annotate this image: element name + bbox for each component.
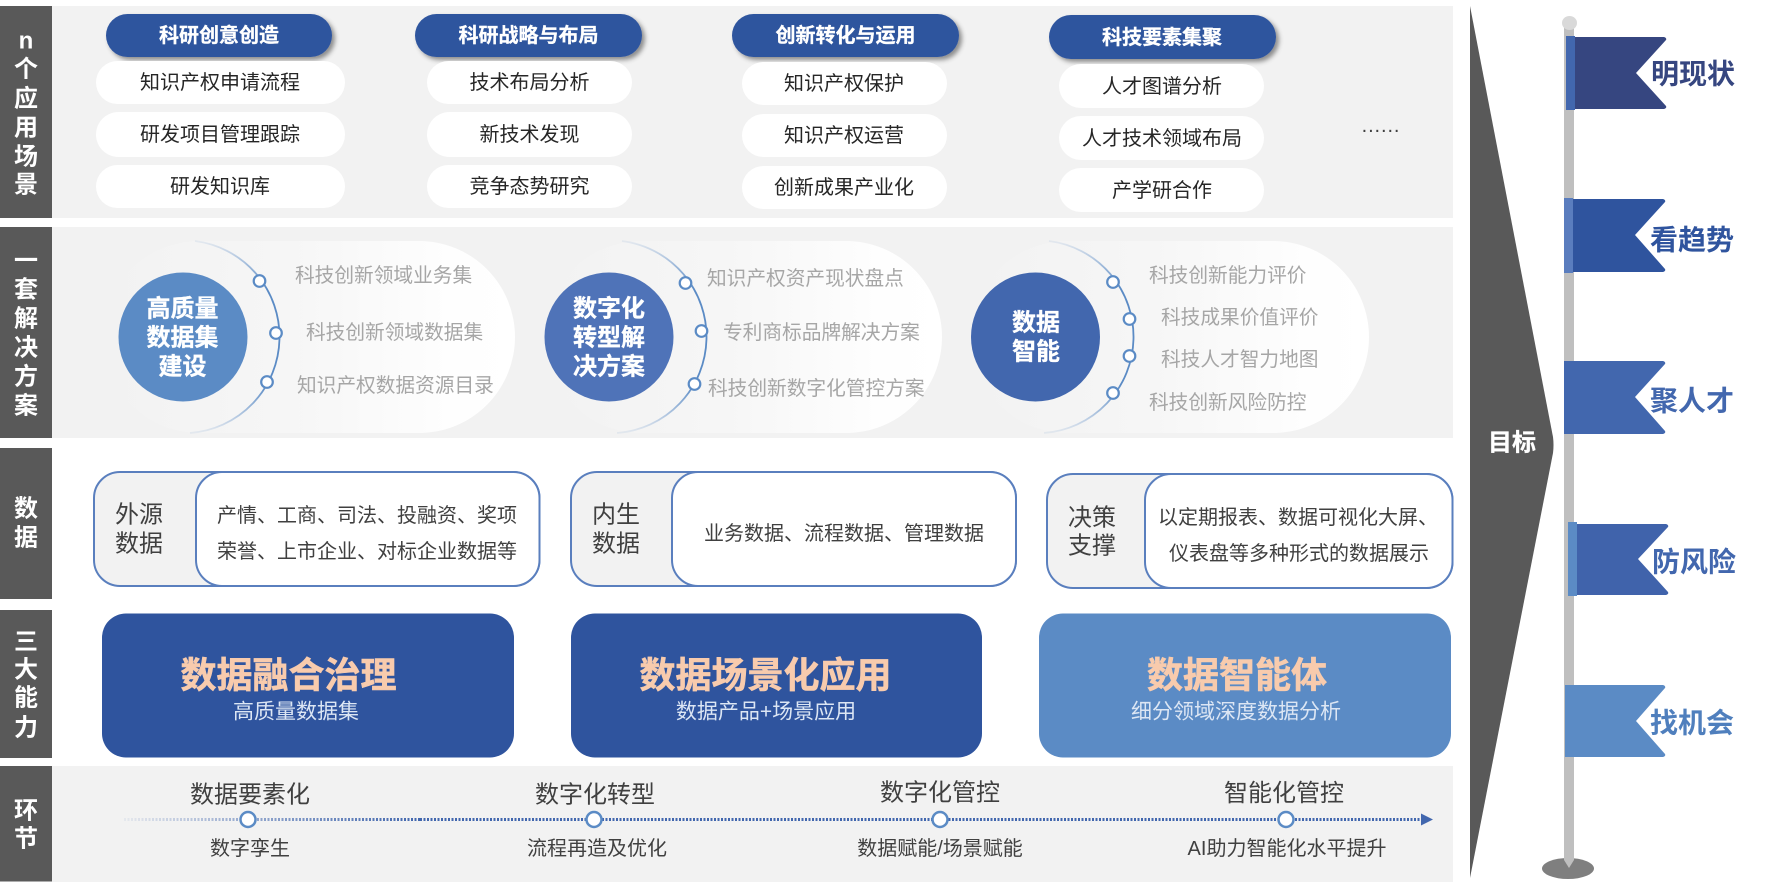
solution: digital transformation: 决方案 [573, 353, 645, 381]
solution: digital transformation: 数字化 [573, 296, 645, 323]
side label: stages: 环 [14, 798, 38, 824]
solution: digital transformation: 知识产权资产现状盘点 [707, 268, 904, 290]
stage 3: 数字化管控 [880, 780, 1000, 806]
side label: n application scenarios [0, 6, 52, 218]
side label: n application scenarios: 个 [14, 56, 38, 83]
column: research creativity: 研发项目管理跟踪 [140, 123, 300, 146]
solution: data intelligence: 科技创新风险防控 [1149, 392, 1306, 414]
side label: solutions: 案 [14, 392, 38, 420]
side label: solutions [0, 227, 52, 438]
stage 4 [1188, 780, 1386, 860]
panel: n application scenarios [0, 6, 1453, 218]
data card: decision support: 仪表盘等多种形式的数据展示 [1169, 542, 1429, 565]
column: research creativity [96, 14, 345, 208]
panel: three capabilities [0, 610, 1451, 758]
stage 2: 数字化转型 [535, 782, 655, 808]
side label: data [0, 448, 52, 599]
capability: data agent [1039, 614, 1451, 758]
data card: external [94, 472, 540, 586]
side label: n application scenarios: 场 [14, 144, 38, 170]
side label: solutions: 方 [14, 362, 38, 390]
ellipsis: ...... [1362, 115, 1400, 137]
solution: data intelligence [971, 241, 1369, 433]
data card: internal [571, 472, 1016, 586]
solution: digital transformation: 专利商标品牌解决方案 [723, 322, 920, 344]
column: research strategy: 竞争态势研究 [470, 175, 590, 198]
capability: data agent: 数据智能体 [1147, 654, 1327, 696]
stage 4: AI助力智能化水平提升 [1188, 837, 1386, 860]
panel: stages timeline [0, 766, 1453, 882]
solution: data intelligence: 科技创新能力评价 [1149, 265, 1307, 287]
side label: stages: 节 [14, 826, 38, 852]
data card: external: 产情、工商、司法、投融资、奖项 [217, 504, 517, 527]
column: talent elements: 科技要素集聚 [1102, 26, 1222, 49]
data card: external: 外源 [115, 502, 163, 529]
flag: trends: 看趋势 [1650, 224, 1734, 256]
column: research strategy [415, 14, 642, 208]
solution: high quality dataset: 高质量 [146, 296, 218, 323]
stage 3 [857, 780, 1023, 860]
side label: capabilities: 能 [14, 684, 38, 712]
side label: n application scenarios: 景 [14, 172, 38, 198]
solution: digital transformation [544, 241, 942, 433]
flag: opportunity: 找机会 [1650, 708, 1734, 738]
capability: data agent: 细分领域深度数据分析 [1131, 700, 1341, 724]
data card: decision support: 支撑 [1068, 533, 1116, 560]
arrow: goal triangle: 目标 [1488, 430, 1536, 456]
capability: data governance [102, 614, 514, 758]
solution: digital transformation: 转型解 [573, 325, 645, 352]
solution: data intelligence: 科技人才智力地图 [1161, 349, 1318, 371]
stage 1: 数字孪生 [210, 837, 290, 860]
flagpole [1542, 16, 1594, 879]
side label: capabilities: 三 [14, 628, 38, 656]
capability: data governance: 高质量数据集 [233, 700, 359, 724]
stage 1: 数据要素化 [190, 782, 310, 808]
panel: data [0, 448, 1452, 599]
flag: opportunity [1565, 685, 1734, 757]
data card: internal: 业务数据、流程数据、管理数据 [704, 522, 984, 545]
data card: internal: 内生 [592, 502, 640, 529]
column: innovation transfer: 知识产权运营 [784, 124, 904, 147]
capability: scenario application: 数据场景化应用 [639, 654, 892, 696]
solution: high quality dataset: 数据集 [146, 325, 218, 352]
capability: data governance: 数据融合治理 [180, 654, 397, 696]
side label: solutions: 解 [14, 306, 38, 332]
column: research creativity: 知识产权申请流程 [140, 71, 300, 94]
flag: current state [1566, 36, 1735, 110]
flag: talent: 聚人才 [1650, 386, 1734, 416]
timeline arrow [124, 814, 1433, 826]
side label: capabilities [0, 610, 52, 758]
data card: decision support: 决策 [1068, 505, 1116, 532]
solution: data intelligence: 智能 [1012, 339, 1060, 366]
stage 1 [190, 782, 310, 860]
flag: risk [1568, 522, 1736, 596]
stage 3: 数据赋能/场景赋能 [857, 837, 1023, 860]
column: talent elements: 人才图谱分析 [1102, 75, 1222, 98]
stage 2: 流程再造及优化 [527, 837, 667, 860]
flag: talent [1564, 361, 1734, 434]
capability: scenario application: 数据产品+场景应用 [676, 700, 856, 724]
column: research creativity: 研发知识库 [170, 175, 270, 198]
side label: stages [0, 766, 52, 882]
side label: solutions: 一 [14, 248, 38, 274]
side label: capabilities: 大 [14, 656, 38, 684]
stage 4: 智能化管控 [1224, 780, 1344, 807]
data card: external: 荣誉、上市企业、对标企业数据等 [217, 540, 517, 563]
data card: internal: 数据 [592, 531, 640, 558]
flag: current state: 明现状 [1651, 58, 1735, 90]
panel: one set of solutions [0, 227, 1453, 438]
column: talent elements: 人才技术领域布局 [1082, 127, 1242, 150]
side label: solutions: 套 [14, 276, 38, 304]
solution: high quality dataset [103, 241, 515, 433]
stage 2 [527, 782, 667, 860]
flag: risk: 防风险 [1652, 546, 1736, 578]
solution: data intelligence: 数据 [1012, 310, 1060, 337]
side label: capabilities: 力 [14, 714, 38, 742]
solution: high quality dataset: 知识产权数据资源目录 [297, 375, 494, 397]
solution: high quality dataset: 建设 [158, 354, 206, 381]
column: innovation transfer: 知识产权保护 [784, 72, 904, 95]
side label: n application scenarios: n [19, 28, 33, 54]
column: innovation transfer [732, 14, 959, 209]
column: research strategy: 技术布局分析 [470, 71, 590, 94]
column: innovation transfer: 创新成果产业化 [774, 176, 914, 199]
data card: decision support [1047, 474, 1452, 588]
side label: data: 数 [14, 496, 38, 522]
side label: n application scenarios: 应 [14, 86, 38, 112]
arrow: goal triangle [1470, 6, 1554, 878]
solution: high quality dataset: 科技创新领域业务集 [295, 265, 472, 287]
side label: solutions: 决 [14, 334, 38, 362]
solution: digital transformation: 科技创新数字化管控方案 [708, 378, 925, 400]
data card: external: 数据 [115, 531, 163, 558]
column: research strategy: 新技术发现 [480, 123, 580, 146]
side label: data: 据 [14, 524, 38, 552]
flag: trends [1564, 198, 1734, 273]
column: research strategy: 科研战略与布局 [458, 23, 598, 47]
column: innovation transfer: 创新转化与运用 [776, 24, 916, 47]
solution: high quality dataset: 科技创新领域数据集 [306, 322, 483, 344]
side label: n application scenarios: 用 [14, 114, 38, 142]
solution: data intelligence: 科技成果价值评价 [1161, 307, 1319, 329]
column: research creativity: 科研创意创造 [159, 23, 279, 47]
capability: scenario application [571, 614, 982, 758]
column: talent elements: 产学研合作 [1112, 179, 1212, 202]
data card: decision support: 以定期报表、数据可视化大屏、 [1158, 506, 1438, 529]
column: talent elements [1049, 15, 1276, 212]
